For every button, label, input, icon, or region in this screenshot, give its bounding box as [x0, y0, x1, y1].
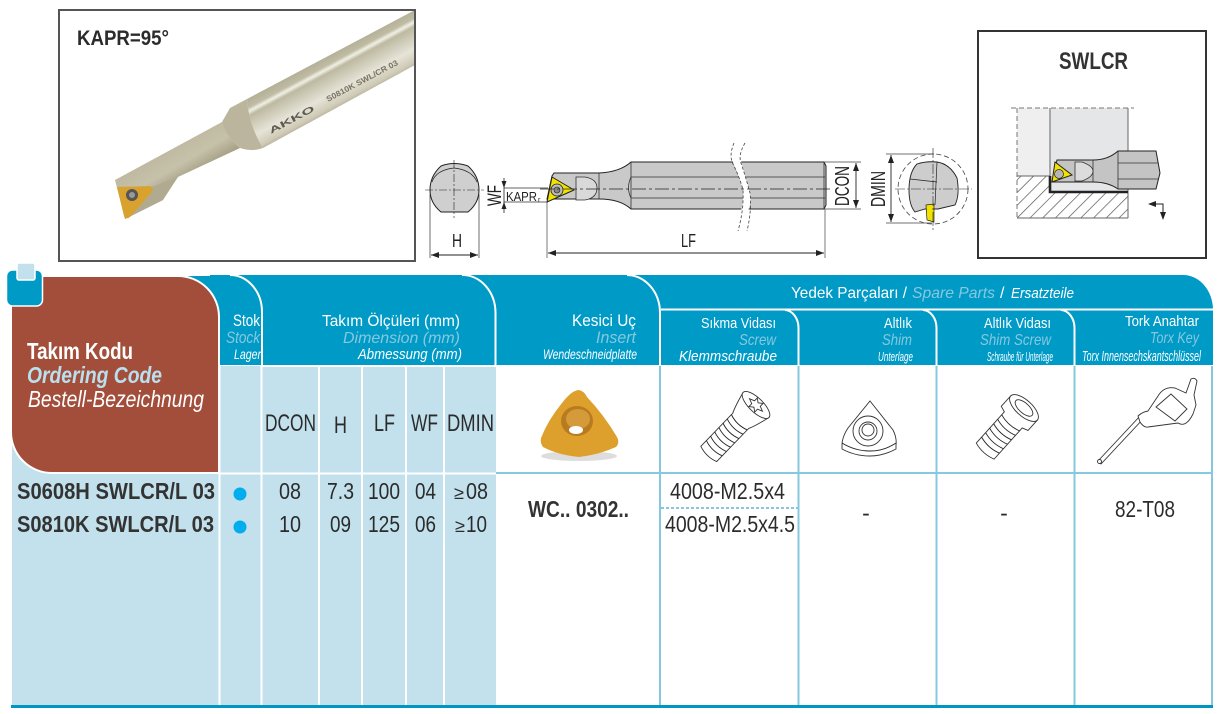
- table header: dimensions: Abmessung (mm): [357, 346, 462, 363]
- sub-column: shim screw: Altlık Vidası: [984, 315, 1051, 332]
- dimension DCON: [824, 162, 861, 209]
- icon: shim: [842, 401, 896, 456]
- data row 2: 10: [279, 511, 301, 537]
- data row 2: 09: [330, 511, 351, 537]
- panel: ordering code: Bestell-Bezeichnung: [28, 386, 204, 412]
- workpiece cross-section: [1011, 108, 1134, 220]
- data row 1: 7.3: [327, 478, 354, 504]
- sub-column: shim screw: Shim Screw: [980, 332, 1052, 349]
- data row 1: 100: [368, 478, 400, 504]
- shim value: -: [862, 500, 870, 526]
- dimension DCON: DCON: [832, 166, 854, 206]
- data row 1: [17, 478, 785, 504]
- table header: spare parts: Spare Parts: [912, 285, 995, 302]
- boring tool: [1052, 151, 1160, 189]
- spare parts title: Yedek Parçaları /: [791, 285, 908, 302]
- table header: dimensions: [210, 275, 496, 366]
- feed arrows: [1148, 201, 1166, 220]
- tool shank and head photo: AKKO: [267, 103, 316, 136]
- table header: spare parts: /: [1000, 285, 1005, 302]
- data row 2: S0810K SWLCR/L 03: [17, 511, 214, 537]
- tool shank and head photo: [115, 10, 415, 219]
- dimension DMIN and end view: DMIN: [868, 171, 890, 207]
- sub-column: shim: Unterlage: [878, 349, 913, 364]
- dimension DMIN and end view: [868, 148, 972, 230]
- table header: dimensions: Dimension (mm): [343, 330, 460, 347]
- column headers: dimension symbols: [265, 410, 494, 439]
- SWLCR heading: SWLCR: [1059, 48, 1128, 75]
- dimension LF: [547, 202, 825, 258]
- tool side view: [540, 143, 830, 231]
- panel: tool photo: [59, 10, 415, 261]
- WF and KAPR labels: r: [538, 197, 541, 204]
- sub-column: screw: Sıkma Vidası: [701, 315, 776, 332]
- icon: clamp screw: [694, 387, 774, 468]
- sub-column: torx key: [1082, 313, 1201, 365]
- column headers: dimension symbols: H: [334, 412, 347, 439]
- end view H: H: [452, 231, 462, 251]
- table header: spare parts: [600, 275, 1213, 365]
- data row 2: 125: [368, 511, 400, 537]
- sub-column: torx key: Tork Anahtar: [1125, 313, 1199, 330]
- panel: ordering code: Ordering Code: [27, 362, 162, 388]
- data row 1: 04: [415, 478, 436, 504]
- icon: torx key: [1098, 378, 1197, 464]
- end view H: [425, 160, 484, 258]
- column headers: dimension symbols: LF: [374, 410, 395, 437]
- insert code: WC.. 0302..: [528, 496, 629, 522]
- tool shank and head photo: S0810K SWL/CR 03: [325, 58, 400, 104]
- WF and KAPR labels: KAPR: [506, 189, 537, 204]
- data row 1: 08: [466, 478, 488, 504]
- column headers: dimension symbols: WF: [411, 410, 438, 437]
- table header: dimensions: Takım Ölçüleri (mm): [322, 312, 460, 330]
- table header: stock: Stok: [233, 311, 260, 330]
- sub-column: screw: Klemmschraube: [679, 348, 777, 365]
- bottom rule: [11, 705, 1213, 708]
- data row 2: [17, 511, 795, 537]
- table body: parts grid: [496, 366, 1213, 705]
- table header: insert: Kesici Uç: [572, 311, 636, 330]
- KAPR label: KAPR=95°: [77, 27, 169, 50]
- table header: insert: [450, 275, 660, 366]
- data row 1: 08: [279, 478, 301, 504]
- shim screw value: -: [1000, 500, 1008, 526]
- sub-column: shim: Shim: [882, 332, 912, 349]
- sub-column: shim: [878, 310, 936, 365]
- data row 2: 10: [466, 511, 487, 537]
- table header: insert: Insert: [596, 328, 637, 347]
- data row 1: S0608H SWLCR/L 03: [17, 478, 215, 504]
- panel: SWLCR application: [978, 31, 1206, 258]
- icon: carbide insert: [541, 390, 618, 461]
- data row 2: 06: [415, 511, 436, 537]
- table header: stock: Lager: [234, 346, 262, 362]
- table header: spare parts: Ersatzteile: [1011, 285, 1074, 302]
- table header: insert: Wendeschneidplatte: [543, 346, 637, 362]
- table body: tinted columns: [12, 366, 496, 705]
- data row 1: 4008-M2.5x4: [670, 478, 785, 504]
- data row 2: 4008-M2.5x4.5: [665, 511, 795, 537]
- icon: shim screw: [970, 390, 1043, 465]
- sub-column: shim: Altlık: [884, 315, 912, 332]
- dimension LF: LF: [681, 231, 696, 251]
- sub-column: shim screw: Schraube für Unterlage: [987, 349, 1053, 364]
- spare screw divider: [661, 507, 798, 509]
- panel: ordering code: [11, 276, 219, 473]
- column headers: dimension symbols: DCON: [265, 410, 316, 437]
- table header: stock: [170, 275, 262, 366]
- WF and KAPR labels: [485, 178, 548, 213]
- WF and KAPR labels: WF: [485, 185, 506, 206]
- sub-column: screw: Screw: [739, 332, 777, 349]
- data row 2: ≥: [455, 516, 465, 536]
- torx key value: 82-T08: [1115, 496, 1175, 522]
- sub-column: shim screw: [980, 310, 1074, 365]
- technical drawing: tool dimensions: [425, 143, 972, 258]
- column headers: dimension symbols: DMIN: [447, 410, 494, 437]
- table header: stock: Stock: [226, 328, 261, 347]
- data row 1: ≥: [454, 483, 464, 503]
- panel: ordering code: Takım Kodu: [27, 338, 133, 364]
- icon: corner tab: [6, 263, 42, 306]
- sub-column: screw: [679, 310, 798, 365]
- sub-column: torx key: Torx Key: [1150, 330, 1200, 347]
